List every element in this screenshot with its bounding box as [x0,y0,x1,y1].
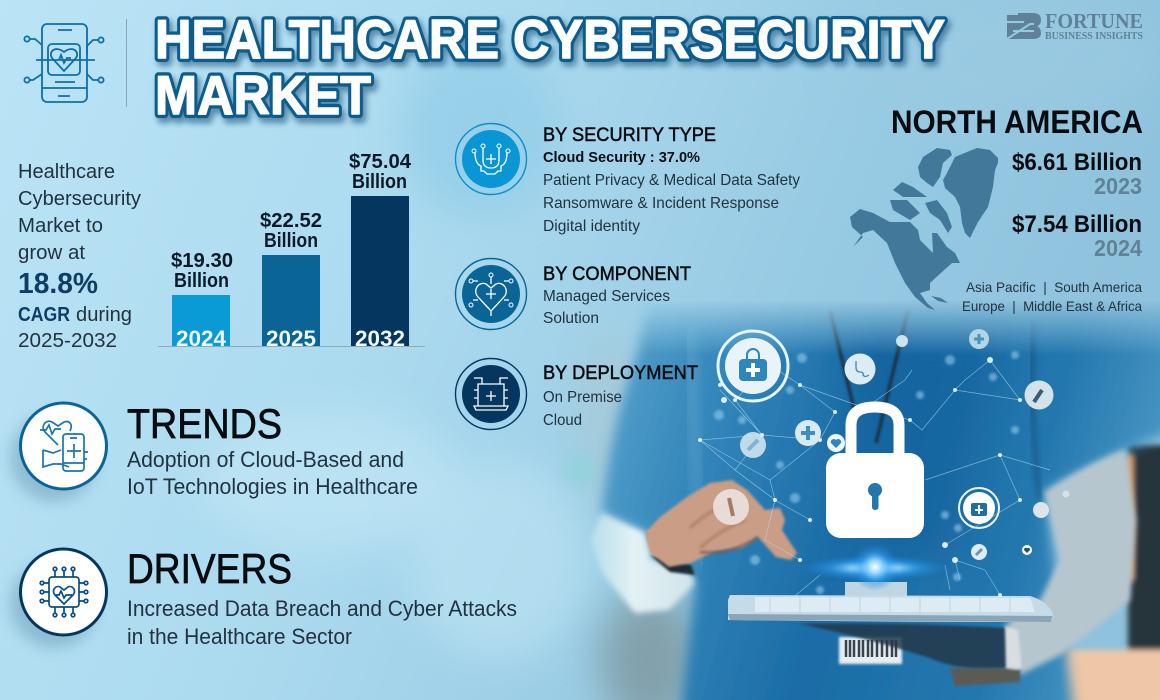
lanyard [830,310,908,443]
backdrop right of worker [1062,445,1160,700]
segment: by security type: Cloud Security : 37.0% [543,149,700,166]
floating cross badges [795,329,989,446]
id badge and barcode [839,582,907,664]
segment: by deployment: Cloud [543,412,582,429]
drivers block: Increased Data Breach and Cyber Attacks [127,596,517,621]
drivers block: DRIVERS [127,545,292,592]
header icon: smartphone heart circuit [24,24,104,102]
segment: by component: Solution [543,310,599,327]
segment: by deployment [456,358,698,430]
photo: healthcare worker with tablet [564,290,1160,700]
trends block: IoT Technologies in Healthcare [127,474,418,499]
regional stats: Asia Pacific | South America [966,279,1142,295]
CAGR statement: 18.8% [18,268,98,300]
CAGR statement: during [76,304,132,326]
bar 2024 [171,250,233,351]
holding hand under tablet [800,624,1010,669]
segment: by deployment: BY DEPLOYMENT [543,362,698,384]
bar 2024: 2024 [176,326,227,351]
bar 2032 [349,151,412,351]
drivers block [10,545,517,649]
map: North America [850,148,998,310]
scrubs torso and sleeves [602,290,1160,700]
header divider [126,19,127,107]
bar 2024: Billion [174,270,229,292]
icon: heart chip [10,549,106,648]
backdrop left of worker [564,330,700,700]
data network [700,360,1050,600]
trends block: TRENDS [127,400,282,447]
title [155,8,948,131]
segment: by component [456,258,691,330]
segment: by security type: Patient Privacy & Medical Data Safety [543,172,800,189]
title: HEALTHCARE CYBERSECURITY [155,8,945,70]
tablet [728,595,1053,622]
right arm sleeve [1005,450,1136,675]
bar 2032: $75.04 [349,151,412,173]
bar 2024: $19.30 [171,250,233,272]
CAGR statement: Healthcare [18,161,115,183]
title: MARKET [158,69,374,131]
CAGR statement: CAGR [18,304,70,326]
regional stats [891,104,1143,314]
segment: by component: BY COMPONENT [543,263,691,285]
CAGR statement: Cybersecurity [18,188,141,210]
icon: laptop with AI circuit [456,358,526,430]
floating heart badge [827,434,1032,555]
title: MARKET [155,64,371,126]
logo: Fortune Business Insights [1007,9,1143,42]
bar 2025 [260,210,322,351]
padlock [826,407,924,538]
bar 2025: 2025 [266,326,316,351]
bar 2032: Billion [352,171,407,193]
bar 2025: Billion [264,230,318,252]
trends block [10,400,418,502]
icon: phone, heart and hand [10,403,106,502]
left arm sleeve [591,513,695,613]
regional stats: 2024 [1094,235,1142,261]
regional stats: 2023 [1094,173,1142,199]
segment: by security type: BY SECURITY TYPE [543,124,716,146]
floating pill and syringe badges [713,335,1070,560]
floating medical kit badge large [718,331,788,401]
segment: by component: Managed Services [543,288,670,305]
logo: Fortune Business Insights: BUSINESS INSIGHTS [1045,31,1143,42]
title: HEALTHCARE CYBERSECURITY [158,12,948,74]
title: MARKET [155,64,371,126]
CAGR statement: 2025-2032 [18,330,117,352]
bar chart: market size [158,151,425,351]
title: HEALTHCARE CYBERSECURITY [155,8,945,70]
floating stethoscope badge [844,354,876,384]
segment: by deployment: On Premise [543,389,622,406]
regional stats: $6.61 Billion [1012,149,1142,176]
pointing hand [645,480,797,575]
icon: gear with medical cross [456,124,526,194]
segment: by security type: Ransomware & Incident Response [543,195,779,212]
bar 2025: $22.52 [260,210,322,232]
network nodes and bokeh [698,351,1022,597]
glow under padlock [800,543,950,591]
floating small medical kit badge [959,488,999,528]
CAGR statement: grow at [18,242,85,264]
regional stats: NORTH AMERICA [891,104,1143,140]
regional stats: $7.54 Billion [1012,211,1142,238]
trends block: Adoption of Cloud-Based and [127,447,404,472]
logo: Fortune Business Insights: FORTUNE [1045,9,1143,33]
wrist watch [950,626,1022,686]
segment: by security type: Digital identity [543,218,640,235]
icon: circuit heart [456,258,526,330]
segment: by security type [456,124,800,235]
regional stats: Europe | Middle East & Africa [962,298,1142,314]
drivers block: in the Healthcare Sector [127,624,352,649]
bar 2032: 2032 [355,326,405,351]
CAGR statement [18,161,141,352]
CAGR statement: Market to [18,215,103,237]
